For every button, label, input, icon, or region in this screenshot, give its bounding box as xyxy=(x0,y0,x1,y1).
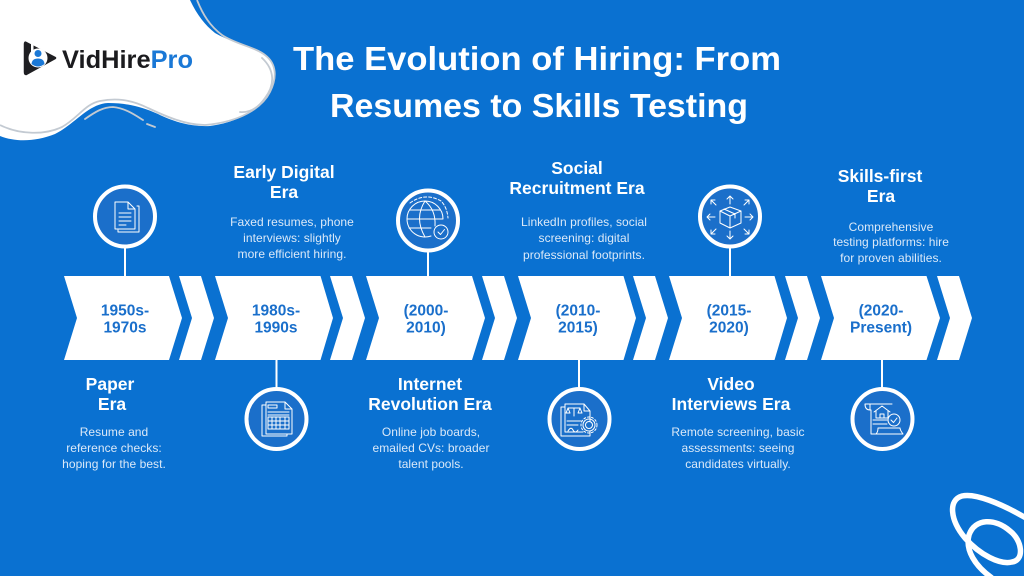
chevron: 1950s-1970s: 1970s xyxy=(103,320,147,336)
chevron: 1980s-1990s: 1980s- xyxy=(252,302,300,320)
description: Paper Era: hoping for the best. xyxy=(62,457,166,471)
icon: property scroll with check xyxy=(852,389,912,449)
description: Skills-first Era: Comprehensive xyxy=(849,220,934,234)
description: Internet Revolution Era xyxy=(372,425,490,471)
chevron: 1950s-1970s: 1950s- xyxy=(101,302,149,320)
description: Video Interviews Era: candidates virtually. xyxy=(685,457,791,471)
description: Early Digital Era: more efficient hiring. xyxy=(238,247,346,261)
description: Video Interviews Era xyxy=(671,425,805,471)
small chevron xyxy=(179,276,214,360)
icon: document xyxy=(95,186,155,246)
description: Early Digital Era xyxy=(230,215,354,261)
chevron: 2020-Present: Present) xyxy=(850,320,912,336)
description: Skills-first Era xyxy=(833,220,949,265)
panel: Social Recruitment Era xyxy=(509,158,668,449)
heading: Video Interviews Era: Video xyxy=(707,374,755,394)
panel: Paper Era xyxy=(62,186,214,471)
logo icon xyxy=(25,41,55,74)
chevron: 2015-2020: (2015- xyxy=(707,302,751,320)
white logo blob xyxy=(0,0,275,140)
title: The Evolution of Hiring: From xyxy=(293,40,781,77)
title: Resumes to Skills Testing xyxy=(330,87,748,124)
description: Paper Era xyxy=(62,425,166,471)
icon: legal document with gear xyxy=(550,389,610,449)
heading: Early Digital Era: Era xyxy=(270,182,298,202)
chevron: 2015-2020: 2020) xyxy=(709,320,749,336)
heading: Paper Era: Paper xyxy=(86,374,135,394)
connector line xyxy=(881,359,883,389)
heading: Social Recruitment Era xyxy=(509,158,645,198)
heading: Social Recruitment Era: Social xyxy=(551,158,603,178)
logo wordmark: VidHirePro xyxy=(62,46,193,74)
panel: Video Interviews Era xyxy=(669,186,820,471)
heading: Social Recruitment Era: Recruitment Era xyxy=(509,178,645,198)
description: Internet Revolution Era: emailed CVs: broader xyxy=(372,441,490,455)
heading: Skills-first Era xyxy=(838,166,922,206)
connector line xyxy=(729,247,731,277)
icon: globe with check xyxy=(398,190,458,250)
heading: Video Interviews Era xyxy=(672,374,791,414)
connector line xyxy=(578,359,580,389)
chevron: 2010-2015 xyxy=(518,276,636,360)
description: Social Recruitment Era: professional footprints. xyxy=(523,248,645,262)
description: Social Recruitment Era xyxy=(521,215,647,262)
small chevron xyxy=(937,276,972,360)
icon: box with arrows xyxy=(700,186,760,246)
icon: spreadsheet document xyxy=(246,389,306,449)
description: Video Interviews Era: Remote screening, basic xyxy=(671,425,805,439)
decorative white loops xyxy=(953,495,1024,576)
chevron: 1980s-1990s: 1990s xyxy=(254,320,298,336)
chevron: 2020-Present xyxy=(821,276,940,360)
panel: Internet Revolution Era xyxy=(366,190,517,471)
chevron: 1950s-1970s xyxy=(64,276,182,360)
chevron: 2000-2010: (2000- xyxy=(404,302,448,320)
heading: Paper Era xyxy=(86,374,135,414)
small chevron xyxy=(785,276,820,360)
chevron: 1980s-1990s xyxy=(215,276,333,360)
description: Paper Era: Resume and xyxy=(80,425,148,439)
description: Internet Revolution Era: talent pools. xyxy=(398,457,464,471)
chevron: 2000-2010 xyxy=(366,276,485,360)
description: Internet Revolution Era: Online job boards, xyxy=(382,425,480,439)
heading: Internet Revolution Era: Revolution Era xyxy=(368,394,492,414)
heading: Early Digital Era: Early Digital xyxy=(233,162,335,182)
small chevron xyxy=(482,276,517,360)
heading: Internet Revolution Era: Internet xyxy=(398,374,462,394)
description: Early Digital Era: Faxed resumes, phone xyxy=(230,215,354,229)
chevron: 2000-2010: 2010) xyxy=(406,320,446,336)
heading: Skills-first Era: Skills-first xyxy=(838,166,922,186)
panel: Skills-first Era xyxy=(821,166,972,449)
heading: Skills-first Era: Era xyxy=(867,186,895,206)
heading: Paper Era: Era xyxy=(98,394,126,414)
chevron: 2015-2020 xyxy=(669,276,787,360)
small chevron xyxy=(330,276,365,360)
description: Video Interviews Era: assessments: seeing xyxy=(681,441,795,455)
description: Social Recruitment Era: screening: digital xyxy=(539,231,629,245)
description: Social Recruitment Era: LinkedIn profiles, social xyxy=(521,215,647,229)
small chevron xyxy=(633,276,668,360)
description: Paper Era: reference checks: xyxy=(66,441,162,455)
description: Early Digital Era: interviews: slightly xyxy=(243,231,341,245)
title xyxy=(293,40,781,124)
heading: Video Interviews Era: Interviews Era xyxy=(672,394,791,414)
logo: VidHirePro xyxy=(25,41,193,74)
connector line xyxy=(427,251,429,277)
chevron: 2010-2015: (2010- xyxy=(556,302,600,320)
connector line xyxy=(276,359,278,389)
panel: Early Digital Era xyxy=(215,162,365,449)
chevron: 2010-2015: 2015) xyxy=(558,320,598,336)
connector line xyxy=(124,247,126,277)
description: Skills-first Era: testing platforms: hire xyxy=(833,235,949,249)
heading: Early Digital Era xyxy=(233,162,335,202)
heading: Internet Revolution Era xyxy=(368,374,492,414)
chevron: 2020-Present: (2020- xyxy=(859,302,903,320)
description: Skills-first Era: for proven abilities. xyxy=(840,251,942,265)
